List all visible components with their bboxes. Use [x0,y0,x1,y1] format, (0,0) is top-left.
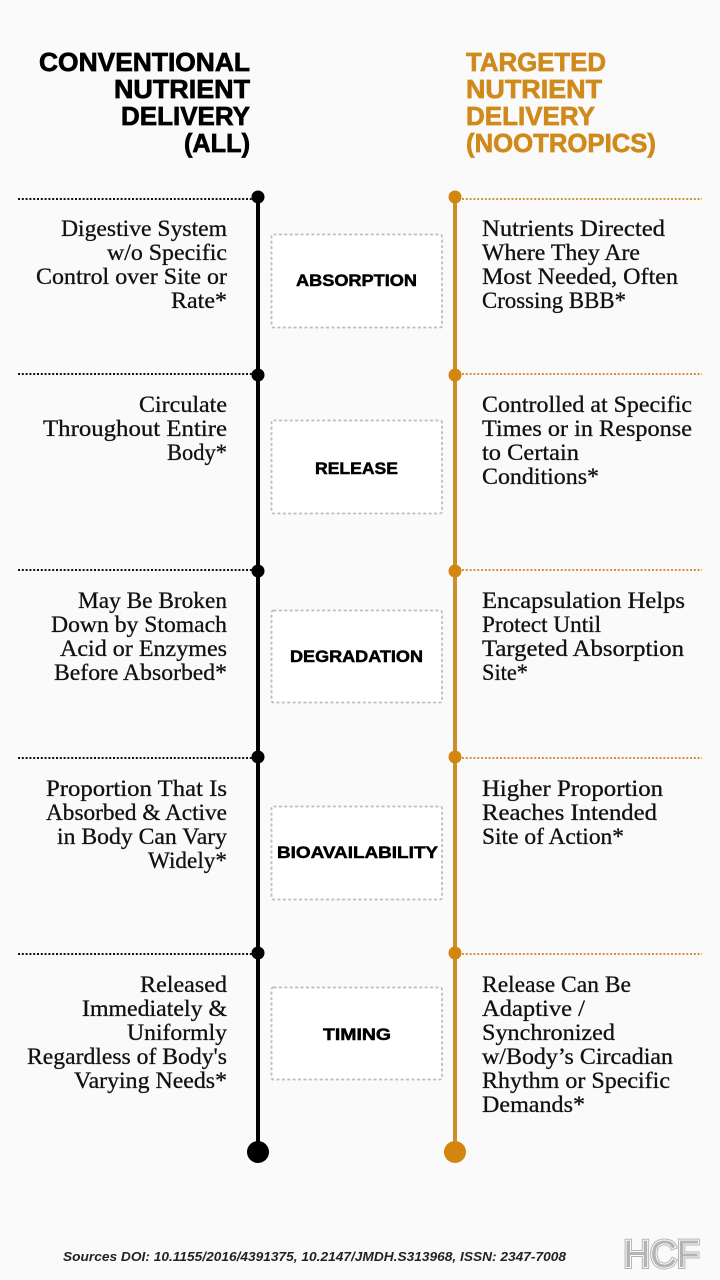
sources line: Sources DOI: 10.1155/2016/4391375, 10.2147/JMDH.S313968, ISSN: 2347-7008 [63,1250,566,1264]
text: targeted timing: Rhythm or Specific [482,1068,670,1094]
text: conventional absorption: Control over Site or [36,264,227,290]
logo: HCF: HCF [624,1234,700,1276]
text: conventional absorption [36,216,227,314]
text: targeted bioavailability: Site of Action* [482,824,624,850]
logo: HCF: HCF [624,1234,700,1276]
label box: bioavailability: BIOAVAILABILITY [277,844,438,862]
panel: bioavailability row [46,776,663,900]
label box: release [272,420,442,514]
text: targeted degradation: Protect Until [482,612,601,638]
text: targeted absorption: Where They Are [482,240,640,266]
label box: degradation: DEGRADATION [290,648,423,666]
heading: targeted nutrient delivery: NUTRIENT [466,74,602,104]
text: conventional bioavailability: in Body Can Vary [57,824,227,850]
text: targeted absorption: Nutrients Directed [482,216,665,242]
text: conventional release: Throughout Entire [43,416,227,442]
text: conventional timing: Immediately & [82,996,227,1022]
text: targeted timing: w/Body’s Circadian [482,1044,673,1070]
text: targeted timing [482,972,673,1118]
text: targeted timing: Adaptive / [482,996,585,1022]
heading: conventional nutrient delivery: DELIVERY [121,101,250,131]
text: conventional absorption: Rate* [171,288,227,314]
logo: HCF: HCF [624,1234,700,1276]
text: targeted release: Conditions* [482,464,599,490]
text: targeted bioavailability: Reaches Intended [482,800,657,826]
label box: timing: TIMING [323,1026,391,1044]
text: conventional bioavailability: Proportion That Is [46,776,227,802]
label box: release: RELEASE [315,460,398,478]
text: conventional timing: Regardless of Body's [27,1044,227,1070]
text: conventional timing: Varying Needs* [74,1068,227,1094]
heading: conventional nutrient delivery: (ALL) [184,128,250,158]
text: targeted release: Controlled at Specific [482,392,692,418]
timeline: targeted [444,190,702,1163]
text: conventional absorption: Digestive System [61,216,227,242]
panel: absorption row [36,216,678,328]
text: targeted timing: Demands* [482,1092,585,1118]
text: targeted degradation: Encapsulation Helps [482,588,685,614]
text: targeted release: Times or in Response [482,416,692,442]
text: targeted timing: Release Can Be [482,972,631,998]
timeline: conventional [18,190,269,1163]
panel: release row [43,392,692,514]
heading: conventional nutrient delivery: CONVENTIONAL [39,47,250,77]
text: conventional release: Circulate [139,392,227,418]
text: targeted absorption: Most Needed, Often [482,264,678,290]
text: conventional bioavailability: Absorbed & Active [46,800,227,826]
text: conventional degradation [51,588,227,686]
label box: degradation [272,610,442,702]
text: conventional bioavailability: Widely* [148,848,227,874]
text: conventional timing: Released [140,972,227,998]
text: targeted degradation: Site* [482,660,528,686]
text: targeted bioavailability [482,776,663,850]
text: conventional degradation: Down by Stomach [51,612,227,638]
text: conventional degradation: Before Absorbed* [54,660,227,686]
text: targeted timing: Synchronized [482,1020,615,1046]
text: conventional release: Body* [167,440,227,466]
heading: targeted nutrient delivery: TARGETED [466,47,606,77]
label box: timing [272,988,442,1080]
heading: conventional nutrient delivery: NUTRIENT [114,74,250,104]
heading: targeted nutrient delivery [466,47,656,158]
text: targeted release: to Certain [482,440,579,466]
label box: bioavailability [272,806,442,900]
label box: absorption [272,234,442,328]
text: conventional degradation: Acid or Enzymes [60,636,227,662]
text: conventional release [43,392,227,466]
panel: degradation row [51,588,685,702]
text: targeted degradation: Targeted Absorption [482,636,684,662]
text: conventional degradation: May Be Broken [78,588,227,614]
text: conventional timing [27,972,227,1094]
heading: targeted nutrient delivery: DELIVERY [466,101,595,131]
text: targeted degradation [482,588,685,686]
text: conventional bioavailability [46,776,227,874]
text: targeted release [482,392,692,490]
text: targeted absorption: Crossing BBB* [482,288,626,314]
panel: timing row [27,972,673,1118]
text: conventional timing: Uniformly [127,1020,227,1046]
heading: targeted nutrient delivery: (NOOTROPICS) [466,128,656,158]
heading: conventional nutrient delivery [39,47,250,158]
label box: absorption: ABSORPTION [296,272,417,290]
text: targeted bioavailability: Higher Proportion [482,776,663,802]
text: conventional absorption: w/o Specific [107,240,227,266]
text: targeted absorption [482,216,678,314]
